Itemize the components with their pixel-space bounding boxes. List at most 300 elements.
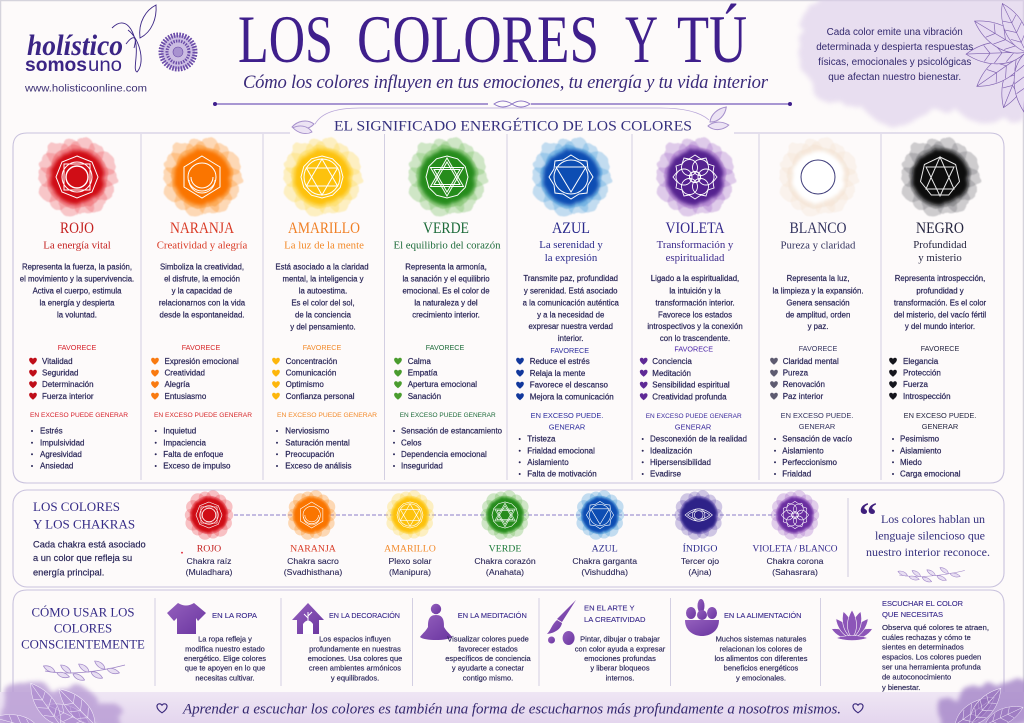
usage: escuchar: ESCUCHAR EL COLOR <box>882 599 963 608</box>
usage: ropa: EN LA ROPA <box>212 611 258 620</box>
usage sprig <box>43 658 125 684</box>
chakra row: naranja <box>284 490 342 577</box>
favorece list blanco: Pureza <box>783 368 809 378</box>
tagline rojo: La energía vital <box>43 240 111 252</box>
favorece list blanco <box>770 357 839 401</box>
usage: alimentacion: los alimentos con diferentes <box>715 654 808 663</box>
footer band <box>0 692 1024 723</box>
heading azul: AZUL <box>552 220 590 237</box>
usage: escuchar: ser una herramienta profunda <box>882 662 982 672</box>
exceso list blanco <box>774 435 853 479</box>
usage: meditacion: EN LA MEDITACIÓN <box>458 611 527 620</box>
exceso list verde: Inseguridad <box>401 462 443 471</box>
exceso list blanco: Frialdad <box>782 470 811 479</box>
favorece list rojo: Seguridad <box>42 368 78 378</box>
tagline azul: La serenidad y <box>539 239 603 251</box>
description naranja: Simboliza la creatividad, <box>160 262 244 272</box>
usage: arte <box>547 600 666 682</box>
tagline negro: y misterio <box>918 252 962 264</box>
favorece list blanco: Renovación <box>783 380 825 389</box>
usage: alimentacion: y emocionales. <box>736 674 786 682</box>
description blanco: y paz. <box>808 322 828 331</box>
usage: ropa: modifica nuestro estado <box>185 644 265 653</box>
chakra row: indigo <box>675 490 723 577</box>
footer heart left <box>157 704 167 713</box>
tagline azul: la expresión <box>545 252 598 264</box>
favorece list amarillo: Confianza personal <box>286 392 355 401</box>
favorece list violeta: Sensibilidad espiritual <box>652 380 730 390</box>
description blanco: de amplitud, orden <box>786 310 850 320</box>
icon: house <box>292 603 324 634</box>
usage: arte: y liberar bloqueos <box>590 664 650 673</box>
usage: escuchar: QUE NECESITAS <box>882 610 943 619</box>
description blanco: Genera sensación <box>786 299 850 308</box>
exceso list negro: Carga emocional <box>900 470 961 479</box>
chakra icon blanco <box>779 137 857 217</box>
logo: somos <box>25 55 87 76</box>
exceso list amarillo: Exceso de análisis <box>285 462 352 471</box>
chakra icon verde <box>408 137 486 217</box>
chakra row: naranja: Chakra sacro <box>287 556 339 566</box>
favorece list amarillo: Optimismo <box>286 380 324 389</box>
description violeta: con lo trascendente. <box>660 334 730 343</box>
description rojo: Representa la fuerza, la pasión, <box>22 262 132 272</box>
description azul: a la comunicación auténtica <box>523 299 619 308</box>
description amarillo: y del pensamiento. <box>290 322 356 332</box>
website: www.holisticoonline.com <box>24 84 147 94</box>
favorece list amarillo: Comunicación <box>286 368 336 378</box>
column: verde <box>393 137 503 471</box>
usage: escuchar: cuáles rechazas y cómo te <box>882 633 971 642</box>
usage: decoracion: y equilibrados. <box>331 674 379 682</box>
favorece list verde <box>394 357 477 401</box>
usage: decoracion: emociones. Usa colores que <box>308 654 402 663</box>
chakra row: violeta blanco: VIOLETA / BLANCO <box>752 544 838 554</box>
quote text: Los colores hablan un <box>881 512 985 526</box>
description verde: emocional. Es el color de <box>402 286 490 296</box>
section heading flourish <box>292 107 730 138</box>
exceso label rojo: EN EXCESO PUEDE GENERAR <box>30 412 128 419</box>
usage: decoracion: profundamente en nuestras <box>309 644 401 653</box>
description violeta: Ligado a la espiritualidad, <box>651 274 739 283</box>
chakra row: violeta blanco: Chakra corona <box>767 556 824 566</box>
icon: lotus <box>830 610 874 641</box>
exceso list rojo: Agresividad <box>40 450 82 459</box>
exceso list negro: Pesimismo <box>900 435 940 444</box>
chakra row: rojo: ROJO <box>197 544 221 554</box>
chakra connector <box>234 514 778 516</box>
section heading: EL SIGNIFICADO ENERGÉTICO DE LOS COLORES <box>334 118 692 134</box>
usage: meditacion <box>420 604 532 682</box>
exceso list negro <box>892 435 961 479</box>
description negro: profundidad y <box>916 286 964 296</box>
exceso list violeta <box>642 435 747 479</box>
description azul: y a la necesidad de <box>537 310 604 320</box>
favorece list naranja <box>151 357 239 401</box>
column: naranja <box>151 137 252 471</box>
usage heading: COLORES <box>54 622 112 636</box>
favorece label azul: FAVORECE <box>550 346 589 355</box>
exceso list blanco: Sensación de vacío <box>782 435 853 444</box>
usage: meditacion: y ayudarte a conectar <box>452 664 525 673</box>
description verde: Representa la armonía, <box>405 262 487 272</box>
description azul: Transmite paz, profundidad <box>523 274 618 283</box>
panel: significado energetico <box>13 133 1004 483</box>
exceso list blanco: Aislamiento <box>782 446 824 455</box>
tagline verde: El equilibrio del corazón <box>393 240 501 252</box>
chakra icon amarillo <box>283 137 361 217</box>
favorece list blanco: Paz interior <box>783 392 823 401</box>
description amarillo: Es el color del sol, <box>291 298 355 308</box>
icon: brush and paint <box>547 600 576 645</box>
exceso label naranja: EN EXCESO PUEDE GENERAR <box>154 412 252 419</box>
intro text: que afectan nuestro bienestar. <box>828 72 961 83</box>
description negro: del misterio, del vacío fértil <box>894 310 986 320</box>
exceso list amarillo <box>276 427 352 471</box>
logo: uno <box>88 55 122 76</box>
subtitle: Cómo los colores influyen en tus emociones, tu energía y tu vida interior <box>243 72 769 93</box>
favorece list rojo: Vitalidad <box>42 357 73 366</box>
heading blanco: BLANCO <box>790 220 846 237</box>
exceso label negro: EN EXCESO PUEDE. <box>904 411 976 420</box>
exceso list azul: Frialdad emocional <box>527 446 595 455</box>
quote sprig <box>898 565 965 584</box>
leaves footer right <box>950 683 1024 723</box>
footer message: Aprender a escuchar los colores es también una forma de escucharnos más profundamente a nosotros mismos. <box>182 701 841 717</box>
usage: arte: internos. <box>606 674 634 682</box>
column: blanco <box>770 137 864 479</box>
chakra row: indigo: (Ajna) <box>688 567 712 577</box>
heading rojo: ROJO <box>60 220 94 237</box>
intro text: físicas, emocionales y psicológicas <box>818 57 971 68</box>
logo mandala <box>161 35 195 69</box>
column: amarillo <box>272 137 377 471</box>
description verde: la naturaleza y del <box>414 298 478 308</box>
usage: escuchar: y bienestar. <box>882 683 920 692</box>
favorece list azul: Relaja la mente <box>530 369 586 378</box>
usage: arte: con color ayuda a expresar <box>575 644 666 653</box>
exceso list violeta: Evadirse <box>650 470 682 479</box>
heading negro: NEGRO <box>916 220 964 237</box>
chakra row: rojo: Chakra raíz <box>187 556 231 566</box>
chakra row: azul: AZUL <box>592 544 618 554</box>
exceso list violeta: Desconexión de la realidad <box>650 435 747 444</box>
exceso list verde <box>393 427 503 471</box>
title: TÚ <box>677 1 747 77</box>
chakra row: violeta blanco: (Sahasrara) <box>772 567 818 577</box>
description amarillo: mental, la inteligencia y <box>282 274 364 284</box>
exceso list naranja: Exceso de impulso <box>163 462 231 471</box>
favorece list azul: Mejora la comunicación <box>530 392 614 401</box>
chakra icon violeta <box>656 137 734 217</box>
favorece list violeta: Conciencia <box>652 357 692 366</box>
description azul: interior. <box>558 334 583 343</box>
favorece list naranja: Creatividad <box>164 368 205 378</box>
usage: ropa <box>167 603 266 682</box>
description blanco: Representa la luz, <box>787 274 849 283</box>
chakra row: indigo: Tercer ojo <box>681 556 719 566</box>
description naranja: y la capacidad de <box>172 286 232 296</box>
usage: arte: Pintar, dibujar o trabajar <box>580 634 660 644</box>
chakra row: violeta blanco <box>752 490 838 577</box>
exceso list azul: Falta de motivación <box>527 470 597 479</box>
chakra row: azul: Chakra garganta <box>572 556 637 566</box>
favorece list rojo: Fuerza interior <box>42 392 94 401</box>
favorece label negro: FAVORECE <box>921 344 960 353</box>
chakra icon rojo <box>38 137 116 217</box>
description rojo: el movimiento y la supervivencia. <box>20 274 134 284</box>
chakra row: azul <box>572 490 637 577</box>
chakras heading: LOS COLORES <box>33 499 120 514</box>
exceso list azul: Tristeza <box>527 435 556 444</box>
panel: colores y chakras <box>13 490 1004 587</box>
tagline negro: Profundidad <box>913 239 967 251</box>
exceso list amarillo: Saturación mental <box>285 438 350 447</box>
intro text: determinada y despierta respuestas <box>816 42 973 53</box>
logo: holístico <box>27 29 123 62</box>
exceso list blanco: Perfeccionismo <box>782 458 838 467</box>
tagline violeta: Transformación y <box>657 239 734 251</box>
usage: escuchar: Observa qué colores te atraen, <box>882 623 989 632</box>
column: azul <box>516 137 619 479</box>
title: Y <box>625 1 658 77</box>
description violeta: transformación interior. <box>655 299 735 308</box>
favorece list blanco: Claridad mental <box>783 357 839 366</box>
favorece list violeta: Creatividad profunda <box>652 392 727 401</box>
description verde: la sanación y el equilibrio <box>402 274 490 284</box>
heading amarillo: AMARILLO <box>288 220 360 237</box>
usage: escuchar: sientes en determinados <box>882 642 964 652</box>
exceso list negro: Miedo <box>900 458 922 467</box>
usage: meditacion: contigo mismo. <box>463 674 513 682</box>
chakra icon azul <box>532 137 610 217</box>
usage: meditacion: específicos de conciencia <box>445 654 532 663</box>
intro text: Cada color emite una vibración <box>827 27 963 38</box>
leaves footer left <box>0 678 102 723</box>
exceso list violeta: Hipersensibilidad <box>650 458 711 467</box>
chakra row: indigo: ÍNDIGO <box>683 542 717 554</box>
exceso label azul: GENERAR <box>549 422 585 432</box>
exceso list rojo <box>31 427 84 471</box>
chakras description: a un color que refleja su <box>33 553 132 563</box>
exceso list amarillo: Nerviosismo <box>285 427 330 436</box>
chakra row: rojo <box>181 490 233 577</box>
exceso list violeta: Idealización <box>650 446 692 455</box>
favorece list rojo <box>29 357 94 401</box>
chakras description: energía principal. <box>33 568 104 578</box>
exceso list naranja <box>155 427 231 471</box>
description azul: y serenidad. Está asociado <box>524 286 618 296</box>
heading violeta: VIOLETA <box>666 220 725 237</box>
chakra icon naranja <box>163 137 241 217</box>
quote mark: “ <box>859 495 877 535</box>
exceso label blanco: EN EXCESO PUEDE. <box>781 411 853 420</box>
favorece list negro: Elegancia <box>903 357 939 366</box>
exceso label amarillo: EN EXCESO PUEDE GENERAR <box>277 412 377 419</box>
chakra icon negro <box>901 137 979 217</box>
exceso label blanco: GENERAR <box>799 422 835 431</box>
usage: meditacion: favorecer estados <box>458 644 518 653</box>
chakras heading: Y LOS CHAKRAS <box>33 516 135 531</box>
column: violeta <box>640 137 747 479</box>
usage: ropa: que te apoyen en lo que <box>185 664 265 673</box>
chakra row: amarillo: (Manipura) <box>389 567 431 577</box>
watercolor footer left <box>2 680 123 723</box>
icon: bowl with leaves <box>685 599 719 636</box>
description verde: crecimiento interior. <box>412 310 480 320</box>
favorece list azul <box>516 357 614 401</box>
favorece list violeta: Meditación <box>652 369 691 378</box>
usage: decoracion: EN LA DECORACIÓN <box>329 611 400 620</box>
footer heart right <box>853 704 863 713</box>
usage: alimentacion: EN LA ALIMENTACIÓN <box>724 611 802 620</box>
favorece list naranja: Expresión emocional <box>164 357 239 366</box>
usage: escuchar: espacios. Los colores pueden <box>882 652 981 662</box>
chakra row: verde: (Anahata) <box>486 567 524 577</box>
exceso label azul: EN EXCESO PUEDE. <box>531 411 603 420</box>
exceso label verde: EN EXCESO PUEDE GENERAR <box>400 412 496 419</box>
exceso label violeta: EN EXCESO PUEDE GENERAR <box>646 413 742 420</box>
description azul: expresar nuestra verdad <box>528 322 613 331</box>
description negro: y del mundo interior. <box>905 322 975 331</box>
tagline violeta: espiritualidad <box>666 252 725 264</box>
watercolor wash top right <box>798 0 1024 125</box>
favorece list verde: Calma <box>408 357 431 366</box>
usage: ropa: La ropa refleja y <box>198 634 252 644</box>
usage: decoracion <box>292 603 402 682</box>
exceso list amarillo: Preocupación <box>285 450 334 459</box>
usage: escuchar: de autoconocimiento <box>882 672 951 682</box>
usage: escuchar <box>830 599 989 692</box>
quote text: lenguaje silencioso que <box>875 528 985 542</box>
description blanco: la limpieza y la expansión. <box>772 286 864 296</box>
column: negro <box>889 137 987 479</box>
description violeta: Favorece los estados <box>658 310 732 320</box>
exceso list rojo: Impulsividad <box>40 438 84 447</box>
usage: arte: emociones profundas <box>584 654 656 663</box>
favorece list rojo: Determinación <box>42 380 94 389</box>
chakra row: amarillo: Plexo solar <box>389 556 432 566</box>
description amarillo: de la conciencia <box>295 310 352 320</box>
favorece list amarillo: Concentración <box>286 357 337 366</box>
chakra row: naranja: NARANJA <box>290 544 336 554</box>
usage: decoracion: creen ambientes armónicos <box>309 664 401 673</box>
favorece list amarillo <box>272 357 355 401</box>
tagline amarillo: La luz de la mente <box>284 240 364 252</box>
exceso list negro: Aislamiento <box>900 446 942 455</box>
favorece label violeta: FAVORECE <box>674 345 713 354</box>
exceso list rojo: Ansiedad <box>40 462 73 471</box>
decorative mandala leaves top right <box>966 0 1024 112</box>
description rojo: Activa el cuerpo, estimula <box>33 286 122 296</box>
exceso list naranja: Falta de enfoque <box>163 450 224 459</box>
title <box>238 1 747 77</box>
description rojo: la energía y despierta <box>40 298 115 308</box>
watercolor footer right <box>936 678 1024 723</box>
title: COLORES <box>357 1 599 77</box>
description amarillo: Está asociado a la claridad <box>275 262 369 272</box>
usage: ropa: energético. Elige colores <box>184 654 266 663</box>
usage: arte: LA CREATIVIDAD <box>584 615 646 624</box>
usage: meditacion: Visualizar colores puede <box>447 634 529 644</box>
heading naranja: NARANJA <box>170 220 235 237</box>
chakra row: verde: Chakra corazón <box>474 556 536 566</box>
favorece label amarillo: FAVORECE <box>303 343 342 352</box>
favorece label naranja: FAVORECE <box>182 343 221 352</box>
chakra row: amarillo <box>384 490 436 577</box>
description negro: transformación. Es el color <box>894 299 987 308</box>
description violeta: la intuición y la <box>669 286 721 296</box>
favorece list naranja: Entusiasmo <box>164 392 207 401</box>
exceso label violeta: GENERAR <box>675 422 711 432</box>
title: LOS <box>238 1 333 77</box>
panel: como usar los colores <box>13 590 1004 700</box>
favorece label verde: FAVORECE <box>426 343 465 352</box>
heading verde: VERDE <box>423 220 469 237</box>
tagline blanco: Pureza y claridad <box>781 240 856 252</box>
exceso list naranja: Impaciencia <box>163 438 207 447</box>
quote text: nuestro interior reconoce. <box>866 545 990 559</box>
tagline naranja: Creatividad y alegría <box>157 240 247 252</box>
description naranja: relacionarnos con la vida <box>159 298 246 308</box>
usage: alimentacion: Muchos sistemas naturales <box>716 634 807 644</box>
exceso list naranja: Inquietud <box>163 427 196 436</box>
exceso list rojo: Estrés <box>40 427 63 436</box>
exceso list verde: Celos <box>401 438 421 447</box>
usage heading: CONSCIENTEMENTE <box>21 637 145 651</box>
chakra row: rojo: (Muladhara) <box>186 567 233 577</box>
chakra row: naranja: (Svadhisthana) <box>284 567 342 577</box>
favorece list negro <box>889 357 951 401</box>
description rojo: la voluntad. <box>57 310 97 320</box>
description naranja: el disfrute, la emoción <box>164 274 240 284</box>
favorece list naranja: Alegría <box>164 380 190 389</box>
description violeta: introspectivos y la conexión <box>647 322 743 331</box>
exceso list verde: Dependencia emocional <box>401 450 487 459</box>
description naranja: desde la espontaneidad. <box>160 310 244 320</box>
usage: alimentacion: relacionan los colores de <box>720 644 802 653</box>
exceso list azul <box>519 435 597 479</box>
chakra row: verde: VERDE <box>489 544 521 554</box>
description negro: Representa introspección, <box>895 274 985 283</box>
usage: decoracion: Los espacios influyen <box>319 634 391 644</box>
favorece list negro: Fuerza <box>903 380 928 389</box>
chakra row: amarillo: AMARILLO <box>384 544 436 554</box>
usage: alimentacion: beneficios energéticos <box>724 664 799 673</box>
usage heading: CÓMO USAR LOS <box>31 606 135 620</box>
ornamental divider <box>213 101 792 107</box>
usage: arte: EN EL ARTE Y <box>584 603 635 612</box>
favorece list verde: Empatía <box>408 368 438 378</box>
logo <box>25 5 156 76</box>
favorece list verde: Sanación <box>408 392 441 401</box>
favorece label rojo: FAVORECE <box>58 343 97 352</box>
exceso list verde: Sensación de estancamiento <box>401 427 503 436</box>
favorece list azul: Reduce el estrés <box>530 357 590 366</box>
chakra row: verde <box>474 490 536 577</box>
favorece label blanco: FAVORECE <box>799 344 838 353</box>
usage: alimentacion <box>685 599 808 682</box>
exceso list azul: Aislamiento <box>527 458 569 467</box>
usage: ropa: necesitas cultivar. <box>195 674 255 682</box>
icon: meditator <box>420 604 452 640</box>
favorece list azul: Favorece el descanso <box>530 380 609 390</box>
icon: shirt <box>167 603 206 634</box>
favorece list violeta <box>640 357 730 401</box>
column: rojo <box>20 137 134 471</box>
favorece list verde: Apertura emocional <box>408 380 477 389</box>
favorece list negro: Protección <box>903 368 941 378</box>
